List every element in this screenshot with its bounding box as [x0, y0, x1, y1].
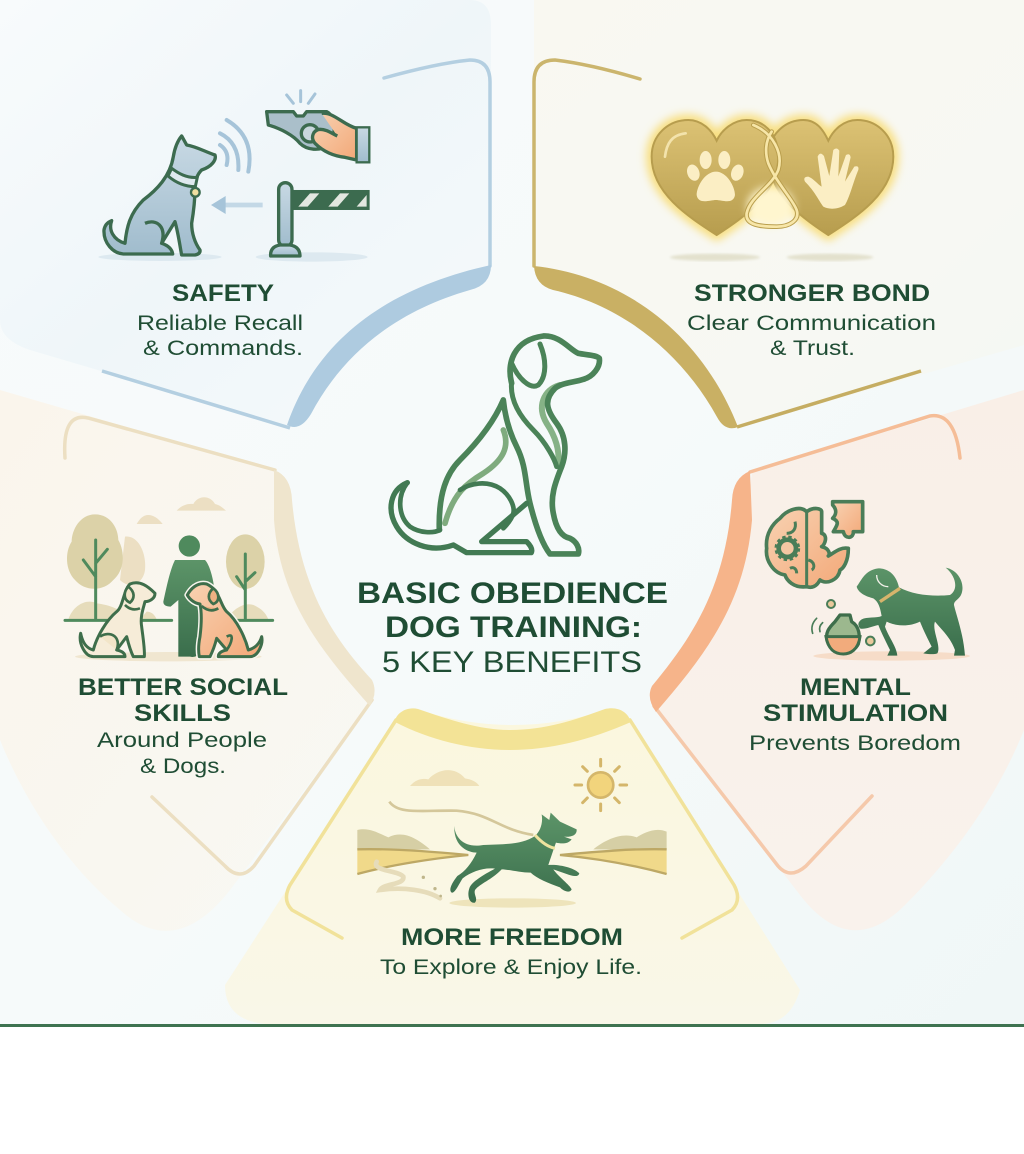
heading: stronger bond: STRONGER BOND	[694, 280, 930, 307]
bottom rule	[0, 1024, 1024, 1027]
icon: safety dog, whistle and barrier	[98, 91, 370, 262]
heading: mental: MENTAL	[800, 674, 911, 701]
panel: stronger bond	[534, 0, 1024, 428]
title: BASIC OBEDIENCE	[357, 577, 668, 610]
text: safety line 2: & Commands.	[143, 337, 303, 360]
panel: better social skills	[0, 390, 375, 931]
icon: running dog on a landscape	[357, 759, 667, 908]
panel: mental stimulation	[650, 390, 1024, 930]
panel: safety	[0, 0, 491, 428]
title	[357, 577, 668, 679]
heading: better social: BETTER SOCIAL	[78, 674, 288, 701]
text: to explore: To Explore & Enjoy Life.	[380, 956, 642, 979]
text: and dogs: & Dogs.	[140, 755, 226, 778]
heading: skills: SKILLS	[134, 700, 231, 727]
text: around people: Around People	[97, 729, 267, 752]
panel: more freedom	[225, 708, 800, 1024]
icon: person with two dogs in a park	[65, 497, 273, 661]
title: DOG TRAINING:	[385, 611, 642, 644]
heading: safety: SAFETY	[172, 280, 274, 307]
icon: two hearts with paw, hand and leash	[652, 120, 893, 261]
text: safety line 1: Reliable Recall	[137, 312, 303, 335]
white footer area	[0, 1027, 1024, 1154]
text: bond line 1: Clear Communication	[687, 312, 936, 335]
text: prevents boredom: Prevents Boredom	[749, 732, 961, 755]
title: 5 KEY BENEFITS	[382, 646, 642, 679]
heading: more freedom: MORE FREEDOM	[401, 924, 623, 951]
text: bond line 2: & Trust.	[770, 337, 855, 360]
central dog logo	[391, 336, 599, 554]
icon: brain puzzle, dog and treat toy	[766, 502, 970, 661]
heading: stimulation: STIMULATION	[763, 700, 948, 727]
